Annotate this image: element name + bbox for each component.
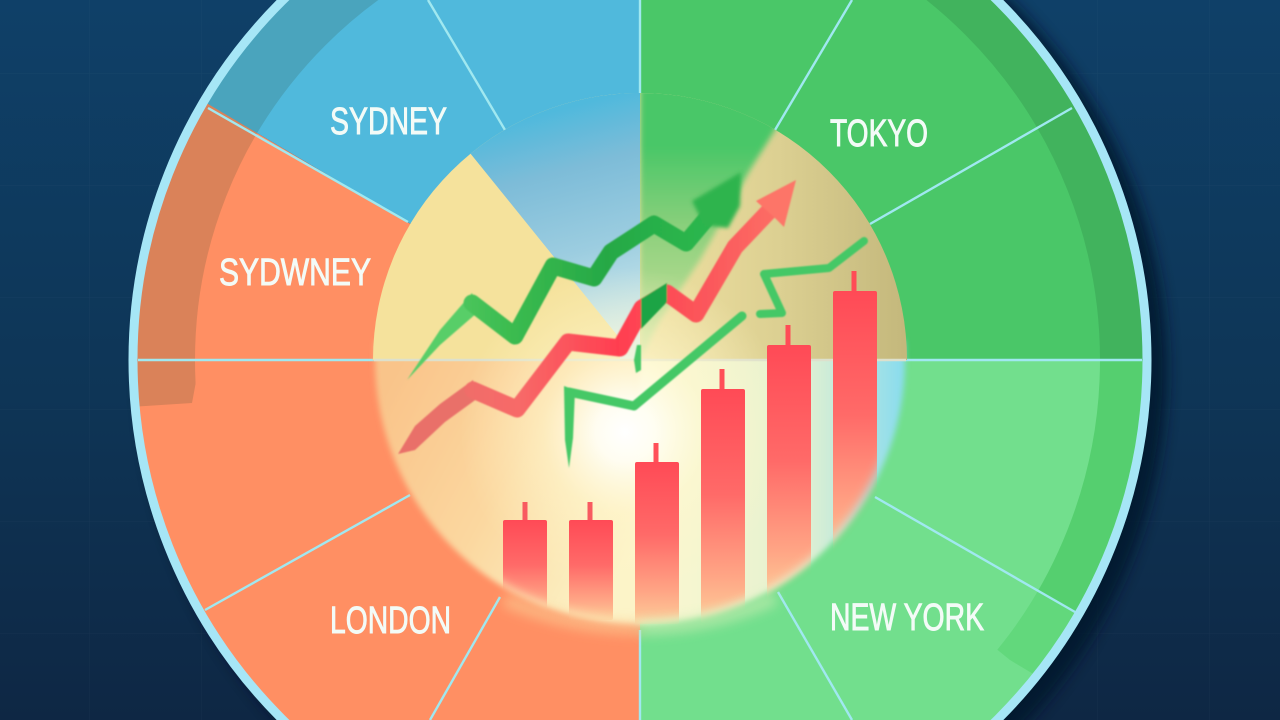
upper-left yellow quadrant: [370, 90, 640, 360]
arrow head: [692, 172, 741, 228]
band: faint rim below spoke: [998, 592, 1074, 674]
candle 2: [569, 502, 613, 620]
segment: New York green: [640, 361, 1100, 720]
band: darker blue rim: [208, 0, 378, 133]
band: lower green rim: [1038, 360, 1142, 611]
segment: Sydney blue: [208, 0, 639, 224]
lower line second stroke: [760, 241, 864, 314]
candlestick chart: [503, 271, 877, 624]
lower quadrants: [365, 340, 916, 641]
label: Sydney left: SYDWNEY: [219, 252, 371, 294]
dark green overlap on red line: [641, 283, 667, 329]
label: London: LONDON: [330, 600, 451, 642]
upper disc fill: [370, 80, 910, 360]
segment: Sydney orange: [195, 104, 410, 359]
candle 1: [503, 502, 547, 606]
outer ring: [133, 0, 1147, 720]
lower disc fill: [365, 340, 916, 641]
label: New York: NEW YORK: [830, 597, 984, 639]
segment: Tokyo green: [641, 0, 1100, 359]
arrow head: [756, 180, 796, 227]
clean centre edge: [620, 80, 640, 360]
upper-left blue wedge: [470, 93, 635, 336]
panel: centre chart disc: [365, 80, 916, 641]
green drip: [634, 345, 641, 373]
lower line first stroke: [569, 316, 742, 406]
red trend arrow: [398, 180, 796, 454]
label: Sydney top: SYDNEY: [330, 101, 447, 143]
lower-right blue quadrant: [640, 340, 916, 641]
candle 6: [833, 271, 877, 566]
bottom haze: orange side: [505, 600, 640, 628]
green trend arrow: [407, 172, 741, 380]
arrow start taper: [407, 293, 478, 380]
arrow shaft: [473, 208, 772, 409]
segment: London orange: [100, 360, 640, 720]
central light glow: [460, 267, 790, 597]
lower-left peach quadrant: [365, 340, 641, 641]
upper-right khaki quadrant: [640, 90, 910, 360]
band: darker green rim: [926, 0, 1142, 360]
lower line taper: [564, 386, 575, 468]
candle 4: [701, 369, 745, 623]
horizontal spoke over disc: [374, 359, 906, 361]
arrow start taper: [398, 380, 478, 454]
spokes: [138, 0, 1142, 720]
bottom haze: green side: [640, 598, 775, 628]
arrow shaft: [472, 212, 712, 336]
band: darker orange rim: [138, 104, 257, 406]
candle 5: [767, 325, 811, 603]
candle 3: [635, 443, 679, 624]
label: Tokyo: TOKYO: [830, 113, 928, 155]
green trend line lower: [564, 241, 864, 468]
upper-right green wedge: [640, 93, 778, 352]
